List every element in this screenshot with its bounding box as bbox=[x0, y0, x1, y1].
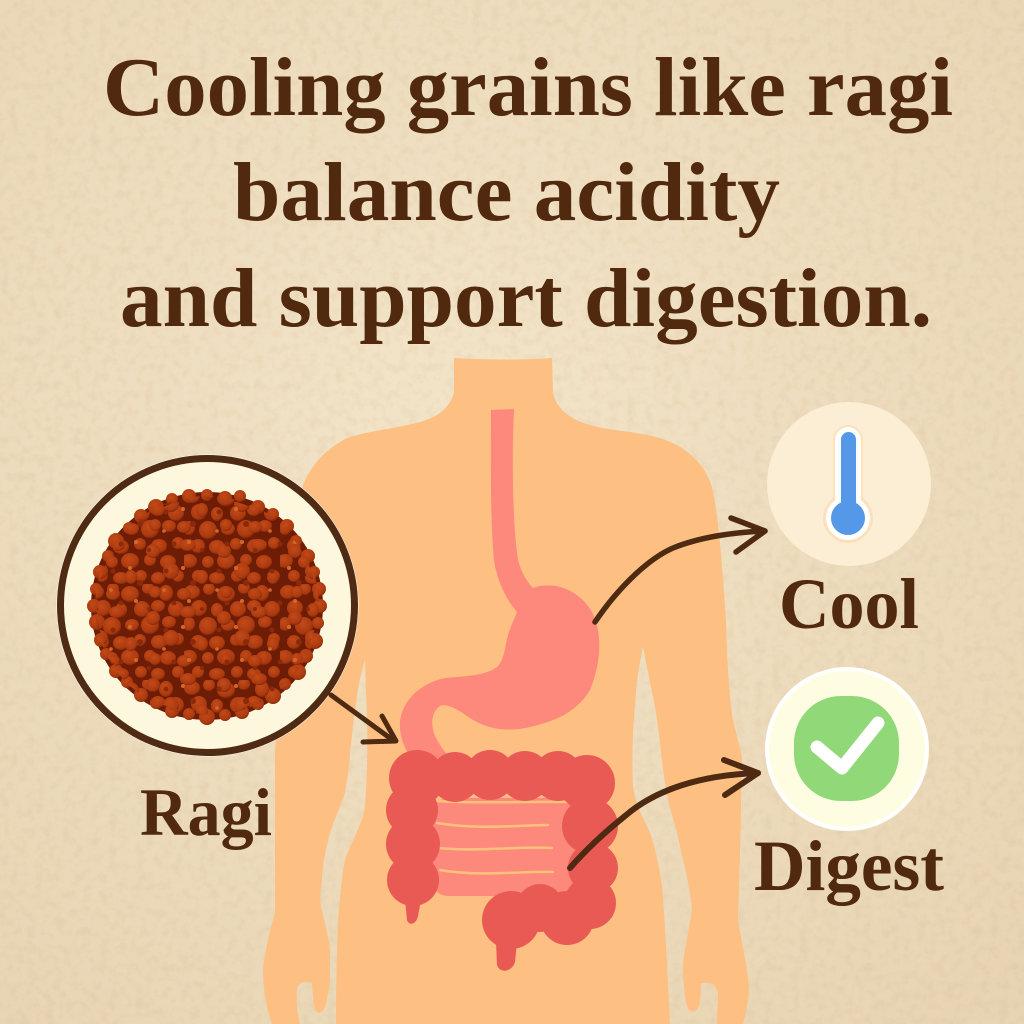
title: balance acidity bbox=[233, 146, 780, 239]
icon: digest check bbox=[767, 669, 927, 829]
small intestine bbox=[432, 798, 597, 896]
body silhouette bbox=[263, 358, 749, 1024]
arrow: ragi to gut bbox=[331, 695, 396, 742]
arrow: stomach to cool bbox=[595, 518, 765, 622]
stomach and esophagus bbox=[400, 409, 599, 760]
title: Cooling grains like ragi bbox=[103, 41, 953, 134]
arrow: intestine to digest bbox=[570, 760, 758, 868]
large intestine bbox=[386, 750, 618, 971]
ragi grains bbox=[87, 489, 327, 725]
title bbox=[103, 41, 953, 345]
title: and support digestion. bbox=[120, 252, 932, 345]
digest label: Digest bbox=[754, 826, 944, 906]
ragi label: Ragi bbox=[140, 774, 272, 850]
cool label: Cool bbox=[779, 564, 919, 644]
icon: thermometer cool bbox=[767, 402, 931, 566]
ragi grain circle bbox=[56, 454, 358, 756]
